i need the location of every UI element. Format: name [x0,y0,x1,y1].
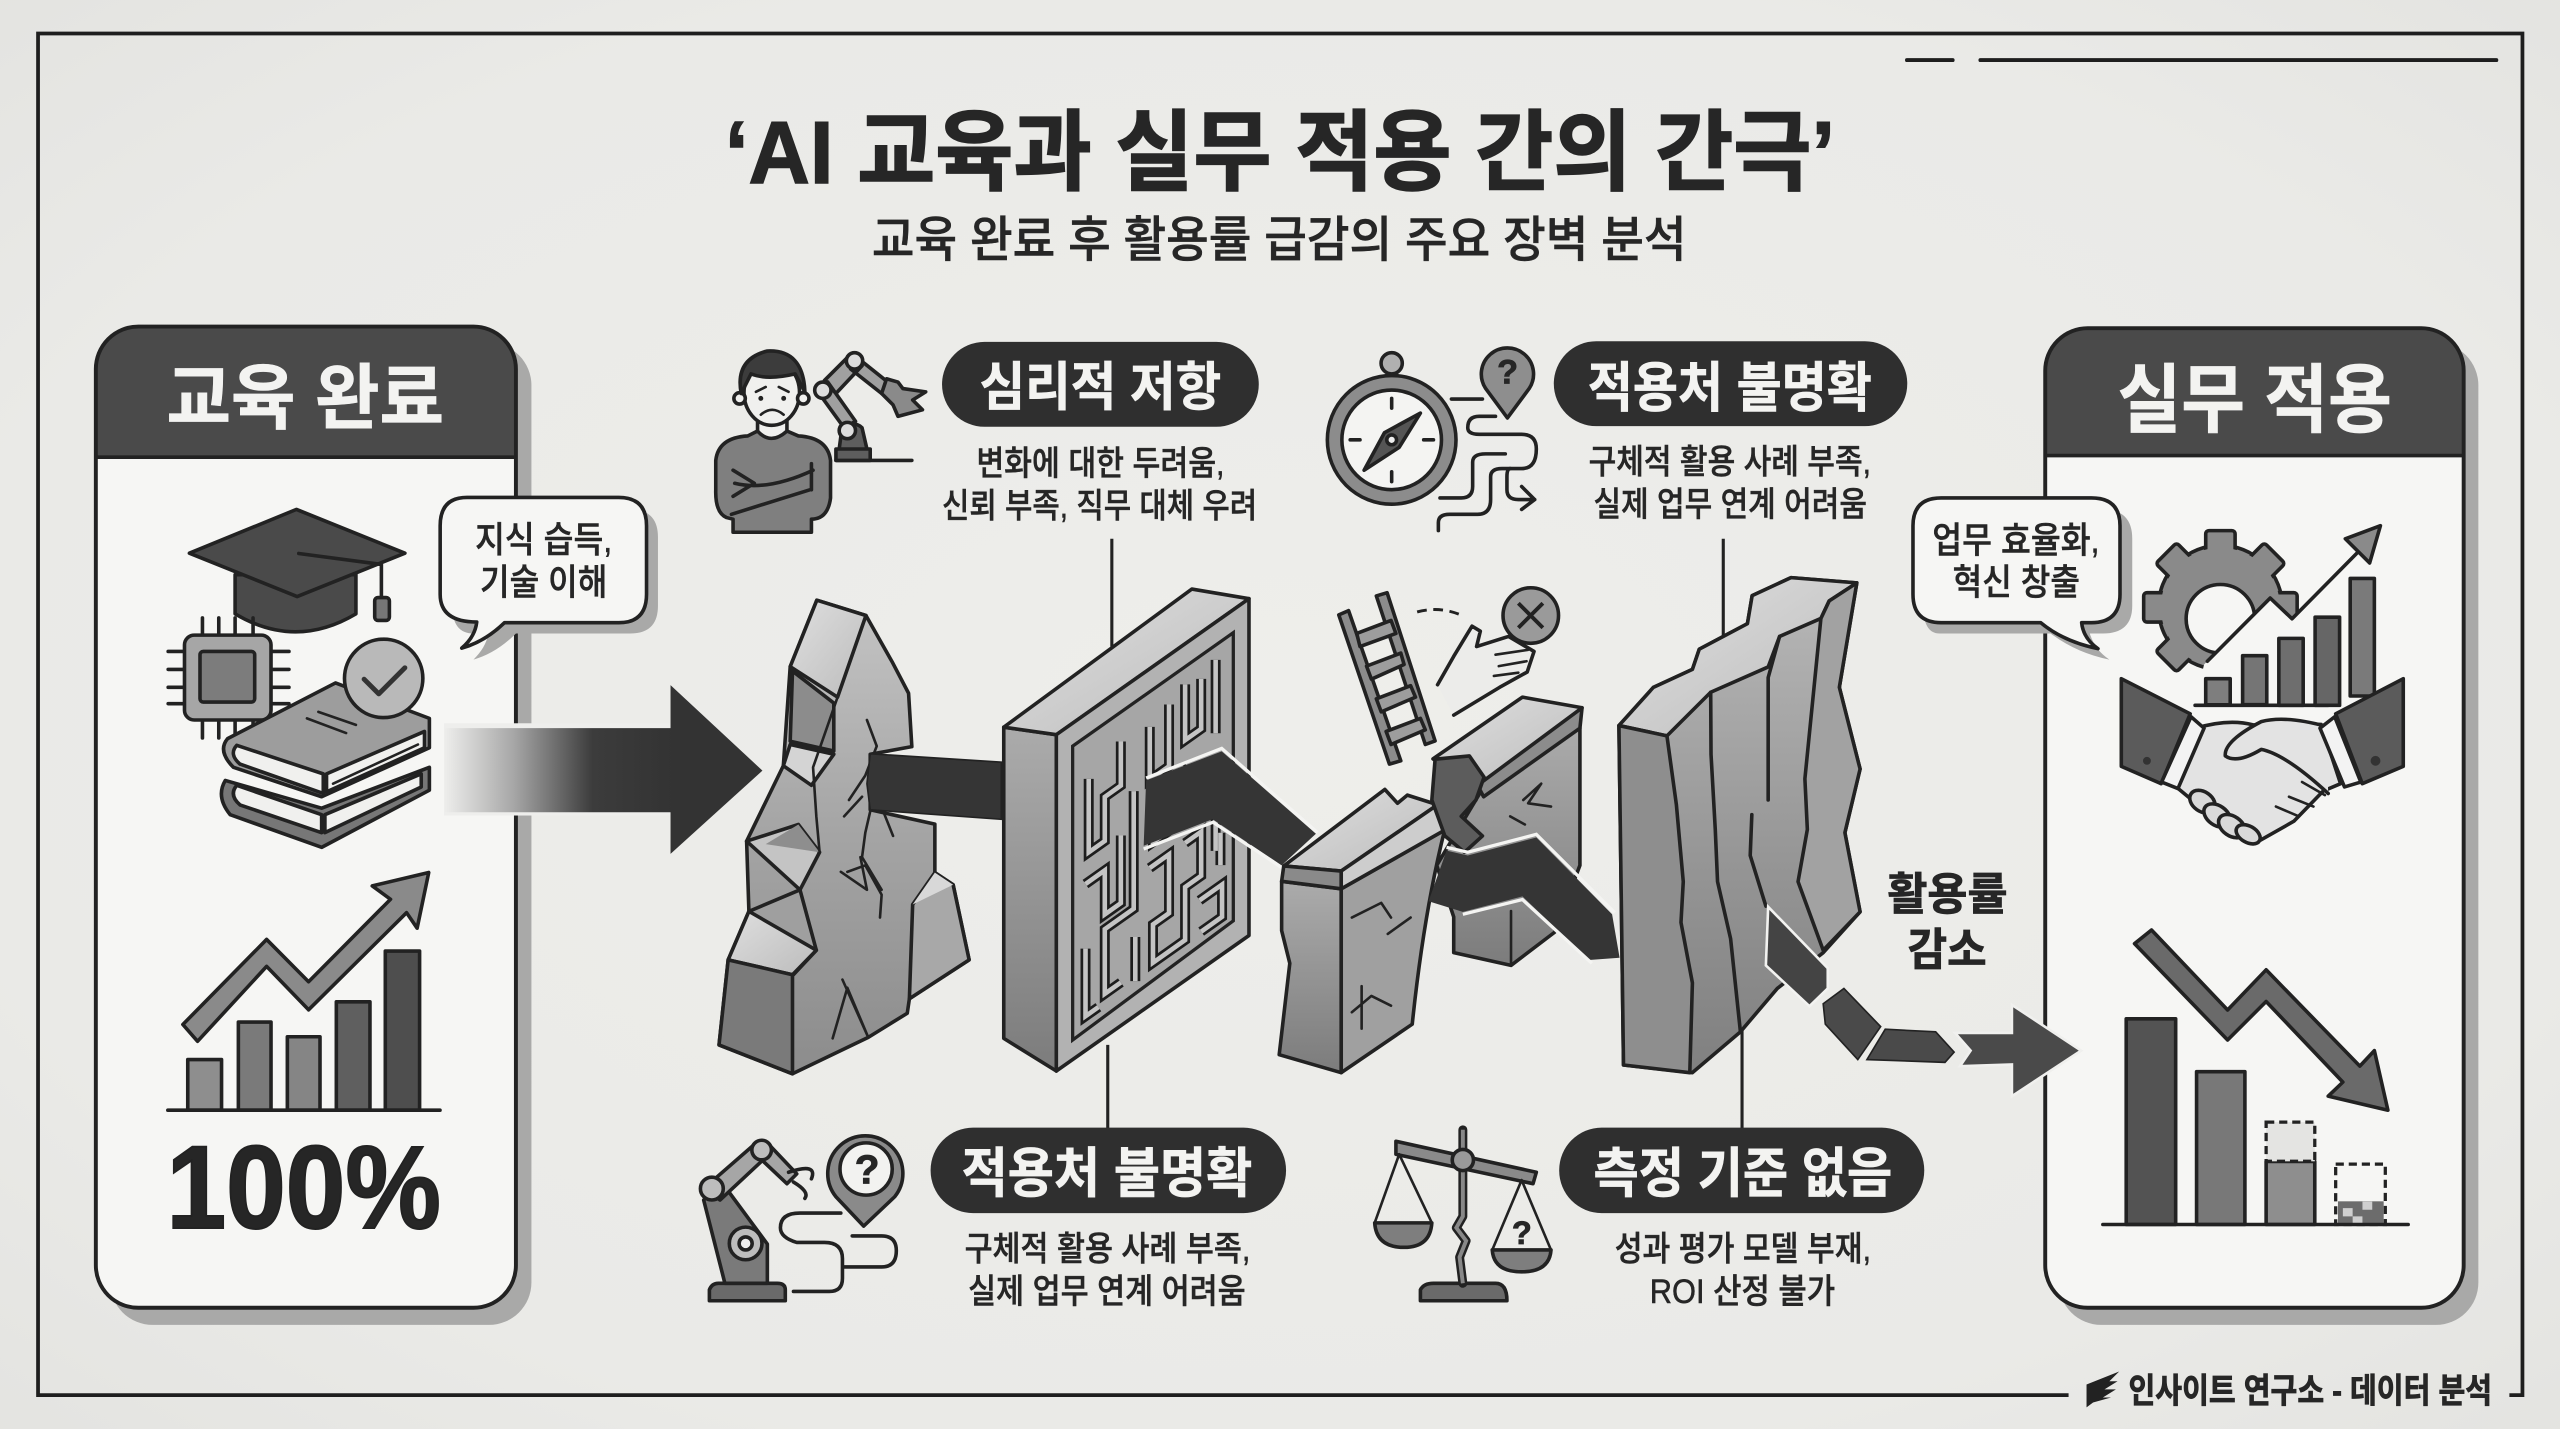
barrier card: 적용처 불명확 하단: 구체적 활용 사례 부족, [965,1230,1250,1268]
flow: rock to maze [867,754,1001,819]
barrier card: 적용처 불명확 상단: 실제 업무 연계 어려움 [1593,486,1867,524]
icon: graduation cap [189,509,405,632]
connector lines [1108,539,1742,1128]
barrier: broken bridge [1279,697,1582,1073]
broken rubble [1432,756,1484,852]
callout: 지식 습득: 지식 습득, [475,519,612,560]
icon: AI chip [168,618,289,738]
bar chart: productivity [2195,526,2380,705]
icon: robot arm [815,353,926,460]
barrier: cliff [1619,578,1860,1073]
icon: compass and path: ? [1497,354,1518,392]
barrier card: 심리적 저항: 변화에 대한 두려움, [976,445,1224,483]
arrow: falling trend [2135,930,2388,1110]
icon: robot arm and location pin [700,1136,903,1301]
flow: broken exit arrow [1766,907,2081,1096]
barrier: rock [719,600,969,1074]
barrier card: 적용처 불명확 하단: 적용처 불명확 [962,1144,1252,1204]
icon: robot arm and location pin: ? [855,1147,880,1193]
flow: through bridge [1429,834,1620,963]
footer: 인사이트 연구소 - 데이터 분석 [2128,1372,2492,1410]
icon: ladder and stop hand [1339,588,1559,764]
back block [1433,697,1582,965]
barrier card: 측정 기준 없음: 성과 평가 모델 부재, [1615,1230,1871,1268]
title: ‘AI 교육과 실무 적용 간의 간극’ [725,103,1835,202]
barrier card: 적용처 불명확 하단 [931,1128,1286,1311]
bar chart: falling utilisation [2103,930,2408,1224]
barrier card: 측정 기준 없음: 측정 기준 없음 [1593,1144,1892,1204]
icon: check badge [344,639,423,718]
flow: through maze [1144,748,1318,869]
barrier card: 심리적 저항: 심리적 저항 [980,359,1221,417]
subtitle: 교육 완료 후 활용률 급감의 주요 장벽 분석 [872,213,1687,267]
callout: 업무 효율화: 업무 효율화, [1932,519,2100,560]
label: 활용률 감소: 활용률 [1887,870,2008,919]
big number: 100% [167,1122,441,1253]
barrier card: 측정 기준 없음: ROI 산정 불가 [1650,1273,1835,1311]
callout: 업무 효율화: 혁신 창출 [1953,561,2080,602]
panel heading: 교육 완료 [167,359,444,439]
front block [1279,789,1445,1073]
barrier card: 측정 기준 없음 [1559,1128,1924,1311]
barrier card: 심리적 저항 [942,342,1259,526]
icon: handshake [2121,679,2403,848]
bar chart: rising [168,873,440,1110]
barrier card: 적용처 불명확 상단: 구체적 활용 사례 부족, [1589,443,1871,481]
label: 활용률 감소: 감소 [1908,926,1987,975]
icon: footer logo [2087,1371,2119,1407]
barrier card: 적용처 불명확 상단: 적용처 불명확 [1588,359,1872,419]
panel: 실무 적용 [2045,328,2478,1325]
icon: gear [2144,531,2358,705]
barrier card: 적용처 불명확 상단 [1554,341,1907,524]
arrow: into barriers [444,685,762,854]
icon: stacked books [221,639,429,847]
panel heading: 실무 적용 [2118,358,2392,442]
arrow: rising trend [183,873,429,1041]
barrier: maze wall [1004,589,1249,1071]
icon: broken scale: ? [1512,1214,1532,1251]
icon: broken scale [1375,1130,1551,1301]
callout: 업무 효율화 [1913,498,2132,660]
callout: 지식 습득: 기술 이해 [480,561,607,602]
icon: resistant person [716,351,831,532]
panel: 교육 완료 [96,327,531,1325]
callout: 지식 습득 [440,497,658,660]
barrier card: 적용처 불명확 하단: 실제 업무 연계 어려움 [968,1273,1246,1311]
label: 활용률 감소 [1887,870,2008,975]
icon: compass and path [1327,348,1536,531]
barrier card: 심리적 저항: 신뢰 부족, 직무 대체 우려 [942,488,1257,526]
